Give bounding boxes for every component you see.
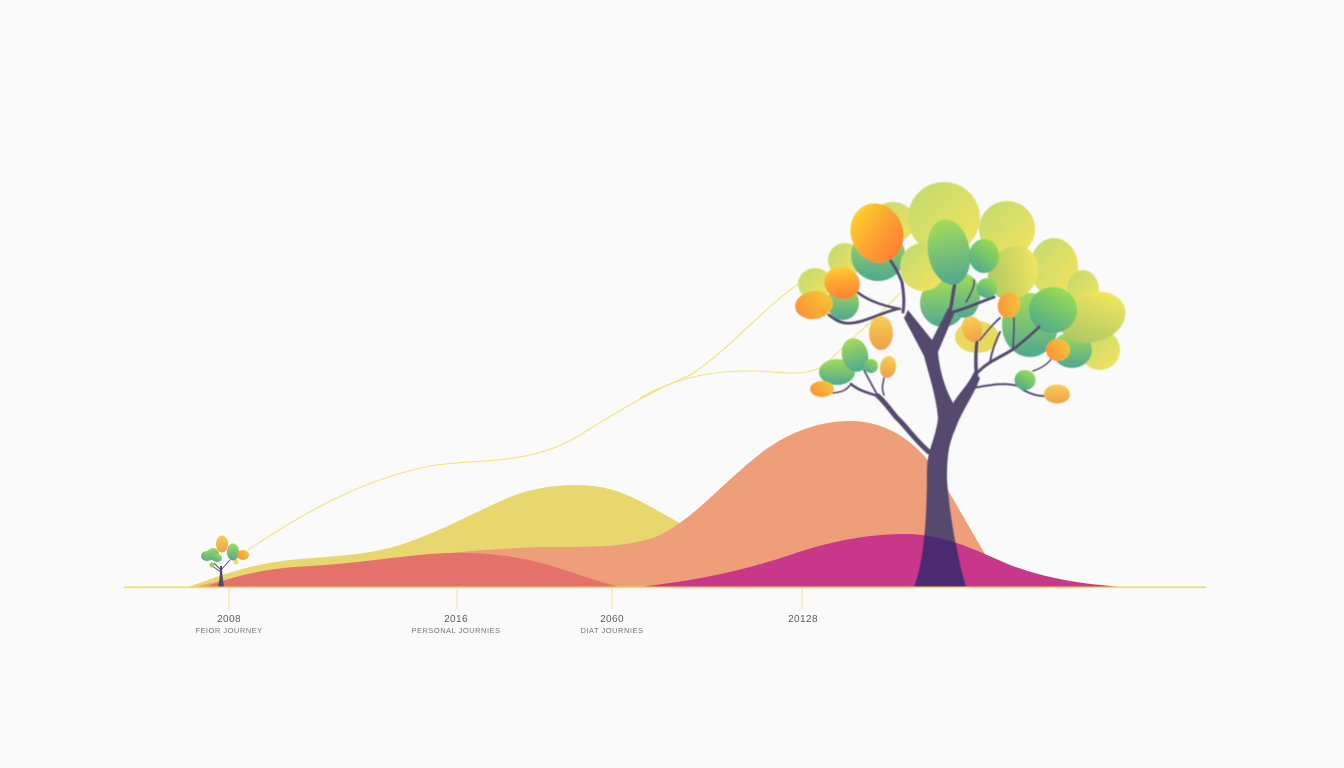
large tree [793,182,1131,587]
label: 2016: PERSONAL JOURNIES [411,626,501,635]
tree: trunk overlap with magenta hill [914,535,966,586]
area: magenta hill [640,534,1125,587]
area: red overlap hill [205,553,620,587]
tree: front leaves [793,196,1070,404]
label: 2060: 2060 [600,614,624,625]
area: yellow hill [188,485,700,587]
label: 2008: 2008 [217,614,241,625]
label: 2008 [195,614,263,635]
tree: back foliage [798,182,1131,370]
timeline axis [124,586,1206,588]
tree: trunk and branches [829,256,1052,587]
label: 2016: 2016 [444,614,468,625]
label: 20128: 20128 [788,614,818,625]
tick marks [229,589,802,609]
area: orange hill [195,421,1000,587]
label: 2060: DIAT JOURNIES [581,626,643,635]
growth curve lines [248,281,900,550]
label: 2060 [581,614,643,635]
small sapling [201,536,249,587]
label: 2016 [411,614,501,635]
label: 2008: FEIOR JOURNEY [195,626,263,635]
